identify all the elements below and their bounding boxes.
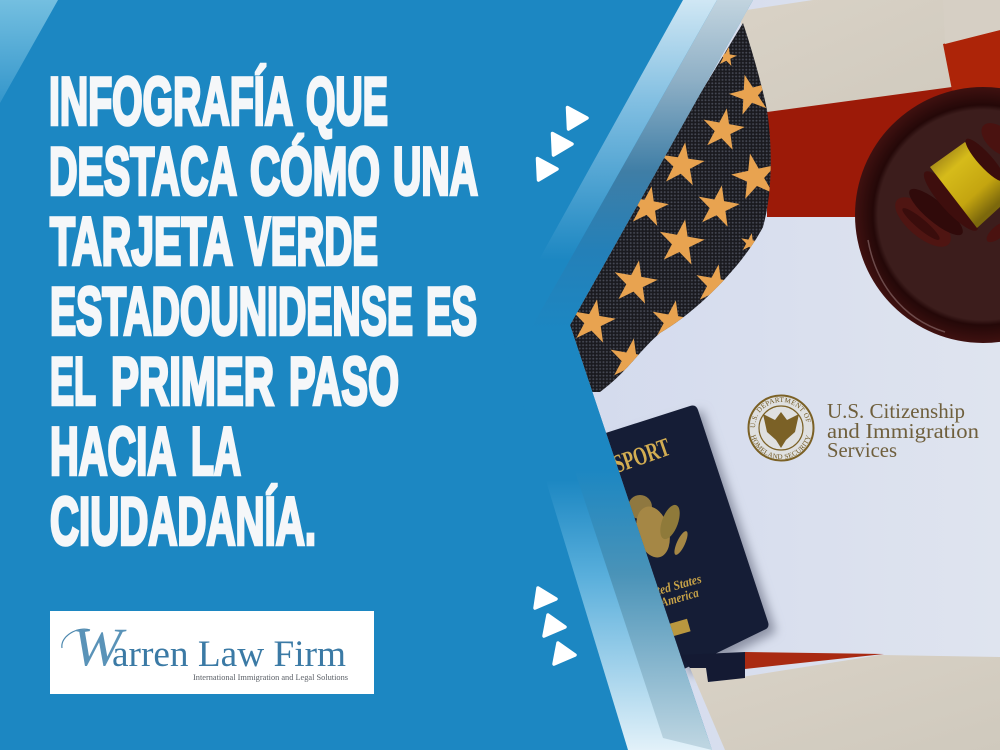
hat [570,23,771,392]
passport emblem [629,495,688,558]
heading: TARJETA [50,204,233,279]
heading: LA [191,414,241,489]
top flag: fold beige [945,30,1000,44]
white paper [560,0,1000,750]
passport [606,406,768,668]
seal [748,394,814,462]
heading: ESTADOUNIDENSE [50,274,413,349]
USCIS text [827,403,979,457]
gold band [930,142,1000,228]
heading: CÓMO [250,133,380,209]
upper light band [500,0,717,330]
seal ring [748,396,814,460]
heading: PRIMER [111,344,274,419]
gavel far head [966,138,1000,181]
top flag: red right stripe [943,30,1000,90]
upper gray band [530,0,753,330]
heading: VERDE [245,204,378,279]
photo panel: America [658,585,701,610]
heading [49,63,478,559]
photo panel [570,0,1000,750]
heading: DESTACA [49,134,237,209]
passport text: SPORT [610,432,674,479]
heading: PASO [289,344,399,419]
corner accent [0,0,58,103]
top flag: red stripe [767,87,954,217]
heading: CIUDADANÍA. [50,483,316,559]
hat fabric [570,23,771,392]
passport shadow [685,406,780,679]
heading: INFOGRAFÍA [49,63,293,139]
background blue panel [0,0,683,750]
passport country text: ted States [655,571,703,598]
heading: EL [50,344,96,419]
gavel [895,123,1000,247]
heading: ES [426,274,477,349]
arrows: upper group [538,108,587,180]
seal upper text: U.S. DEPARTMENT OF [750,397,811,428]
logo [50,611,374,694]
logo tagline: International Immigration and Legal Solutions [193,673,348,682]
seal eagle [763,412,799,448]
lower light band [500,330,712,750]
heading: HACIA [50,414,176,489]
USCIS text: and Immigration [827,419,980,443]
passport chip [670,619,691,636]
gavel end cap [895,198,951,247]
logo background [50,611,374,694]
gavel neck [909,189,963,235]
gavel block highlight [868,240,945,332]
bottom flag: navy [689,652,745,682]
hat stars [576,47,771,376]
logo swash [62,629,90,648]
gavel collar [924,172,978,230]
bottom flag: red [745,652,884,669]
gavel block [855,87,1000,343]
logo script W: W [72,617,128,677]
seal lower text: HOMELAND SECURITY [751,434,810,459]
USCIS text: Services [827,438,897,462]
logo name: arren Law Firm [112,634,346,675]
USCIS text: U.S. Citizenship [827,399,965,423]
arrows: lower group [535,588,575,664]
lower gray band [530,325,712,750]
top flag: beige stripe [740,0,1000,112]
heading: QUE [306,64,388,139]
bottom flag: beige [690,655,1000,750]
heading: UNA [393,134,478,209]
